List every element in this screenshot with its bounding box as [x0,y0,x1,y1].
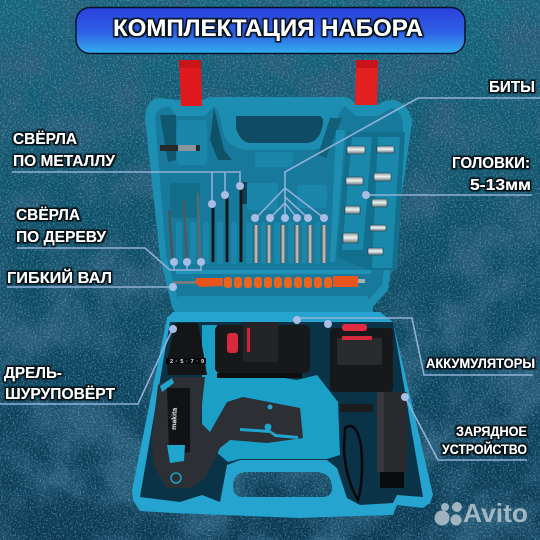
tray raised pads [255,152,293,167]
flexible shaft [173,276,365,288]
label: drills for wood: ПО ДЕРЕВУ [16,229,107,246]
battery one [215,322,310,378]
screwdriver bits [254,225,326,263]
open case: lower half [132,312,433,518]
callout lines [0,98,540,460]
charger with plug and cord [340,392,407,500]
drill-driver: makita [171,408,179,430]
label: sockets: ГОЛОВКИ: [452,155,530,172]
socket compartment [337,132,405,270]
label: drills for wood: СВЁРЛА [16,206,80,224]
drill bits for metal and wood [168,190,242,262]
label: drill-driver: ДРЕЛЬ- [4,365,62,382]
left block with bit [160,115,176,162]
callout dots [169,182,409,401]
Avito watermark [434,498,528,528]
label: drills for metal: ПО МЕТАЛЛУ [13,153,116,170]
drill-driver [152,323,303,488]
label: drill-driver: ШУРУПОВЁРТ [5,385,115,403]
title banner [76,8,465,54]
grooves [176,222,320,264]
label: bits: БИТЫ [489,79,535,96]
open case: upper half [145,97,412,316]
Avito watermark: Avito [463,498,528,528]
battery two [330,324,393,392]
label: sockets: 5-13мм [470,177,531,194]
teal floor around the drill [202,325,340,462]
label: charger: ЗАРЯДНОЕ [456,424,527,439]
red latches [179,60,378,106]
title banner: КОМПЛЕКТАЦИЯ НАБОРА [113,15,423,42]
label: charger: УСТРОЙСТВО [442,442,527,457]
inner cavity [155,106,403,300]
label: batteries: АККУМУЛЯТОРЫ [426,356,535,371]
handle boss with hole [214,106,345,150]
label: flexible shaft: ГИБКИЙ ВАЛ [7,268,112,287]
label: drills for metal: СВЁРЛА [13,130,77,148]
socket heads [343,146,394,255]
drill-driver: 2 · 5 · 7 · 9 [170,359,204,365]
